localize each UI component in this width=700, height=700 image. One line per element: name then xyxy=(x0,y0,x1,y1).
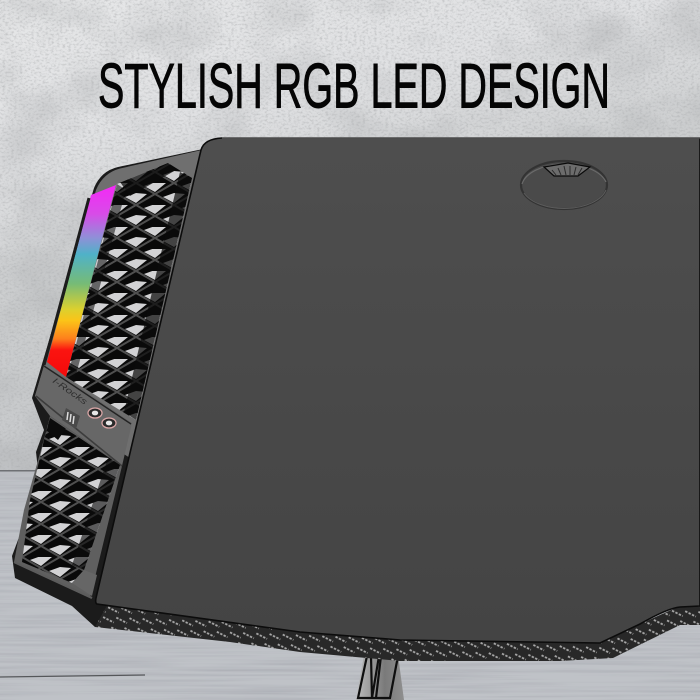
RGB LED strip xyxy=(47,185,116,377)
background: wooden floor xyxy=(0,470,700,700)
vent icon xyxy=(62,408,80,429)
desk leg xyxy=(356,655,404,700)
panel face upper xyxy=(35,150,204,458)
cable grommet xyxy=(521,161,607,209)
desk top surface xyxy=(96,138,700,643)
panel body xyxy=(12,149,203,627)
panel face lower xyxy=(14,416,122,598)
background: concrete wall xyxy=(0,0,700,472)
carbon fibre desk edge xyxy=(95,600,700,661)
strip outer slit xyxy=(44,198,89,365)
button: left xyxy=(88,408,102,418)
lower plate corner xyxy=(72,570,97,596)
grommet cable slot xyxy=(544,163,590,176)
control plate xyxy=(35,366,132,466)
side panel: RGB LED gaming bracket xyxy=(10,149,204,627)
brand logo: I-Rocks xyxy=(51,375,90,407)
upper ventilation mesh xyxy=(66,163,192,420)
lower ventilation mesh xyxy=(22,418,120,583)
button: right xyxy=(102,418,116,428)
